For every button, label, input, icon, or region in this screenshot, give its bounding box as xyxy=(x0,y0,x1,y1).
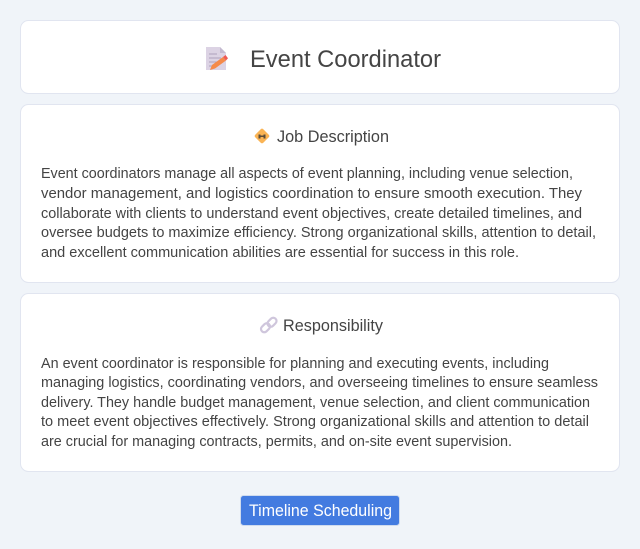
icon: chain link xyxy=(260,316,278,334)
text block: responsibility: are crucial for managing contracts, permits, and on-site event supervision. xyxy=(41,434,512,450)
text block: responsibility: to meet event objectives effectively. Strong organizational skills and attention to detail xyxy=(41,414,589,430)
button: Timeline Scheduling xyxy=(240,496,400,526)
heading: Event Coordinator: Event Coordinator xyxy=(250,46,441,73)
text block: job description: collaborate with clients to understand event objectives, create detailed timelines, and xyxy=(41,206,582,222)
text block: responsibility xyxy=(41,356,598,450)
text block: responsibility: An event coordinator is responsible for planning and executing events, including xyxy=(41,356,549,372)
text block: job description: vendor management, and logistics coordination to ensure smooth execution. They xyxy=(41,186,583,202)
text block: responsibility: managing logistics, coordinating vendors, and overseeing timelines to ensure seamless xyxy=(41,375,598,391)
panel: title xyxy=(20,20,620,94)
panel: job description xyxy=(20,104,620,282)
panel: responsibility xyxy=(20,294,620,472)
text block: job description: and excellent communication abilities are essential for success in this role. xyxy=(41,245,519,261)
icon: construction diamond xyxy=(254,128,270,144)
heading: Job Description: Job Description xyxy=(277,128,389,146)
text block: responsibility: delivery. They handle budget management, venue selection, and client communication xyxy=(41,395,590,411)
button: Timeline Scheduling: Timeline Scheduling xyxy=(249,502,392,520)
heading: Responsibility: Responsibility xyxy=(283,317,384,335)
text block: job description: oversee budgets to maximize efficiency. Strong organizational skills, attention to detail, xyxy=(41,225,596,241)
text block: job description: Event coordinators manage all aspects of event planning, including venue selection, xyxy=(41,166,573,182)
text block: job description xyxy=(41,166,596,261)
icon: document with pencil xyxy=(206,47,228,70)
